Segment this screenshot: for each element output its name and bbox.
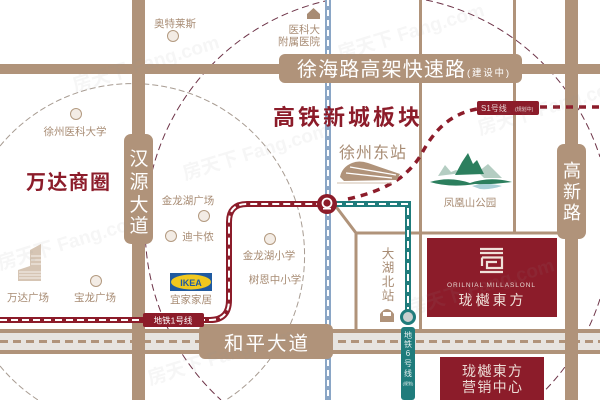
- road: Gaoxin vertical: [565, 0, 578, 400]
- metro line 6: [335, 204, 408, 315]
- icon and label: IKEA: [170, 273, 212, 306]
- POI: outlets: [154, 17, 196, 42]
- watermarks: 房天下 Fang.com: [405, 254, 557, 320]
- road: Hanyuan vertical: [132, 0, 145, 400]
- POI: Jinlonghu primary school: 金龙湖小学: [243, 249, 295, 262]
- label: Dahu North station: 北: [382, 275, 395, 289]
- label: Hanyuan Avenue: 道: [129, 215, 149, 237]
- POI: hospital: 附属医院: [278, 35, 320, 48]
- marker: Dahu North stop: [402, 310, 414, 324]
- label: Xuhai elevated road: [279, 54, 522, 83]
- watermarks: 房天下 Fang.com: [70, 31, 222, 97]
- POI: outlets: 奥特莱斯: [154, 17, 196, 30]
- label: metro line 1: [143, 313, 204, 327]
- panel: project logo: [427, 238, 557, 317]
- label: Xuzhou East station: 徐州东站: [339, 144, 406, 162]
- label: metro line 6: 号: [404, 359, 412, 368]
- icon: subway station: [380, 309, 394, 322]
- project chinese name: 珑樾東方: [458, 292, 524, 308]
- POI: Decathlon: 迪卡侬: [182, 230, 214, 243]
- road: main horizontal road: [0, 64, 600, 74]
- dashed circle: high-speed rail new town: [145, 0, 600, 400]
- label: Dahu North station: 大: [382, 247, 394, 261]
- label: metro line 1: 地铁1号线: [154, 316, 193, 326]
- POI: medical university: [44, 108, 106, 138]
- POI: Powerlong plaza: 宝龙广场: [74, 291, 116, 304]
- label: Xuhai elevated road: 徐海路高架快速路: [297, 58, 465, 81]
- label: metro line 6: 铁: [404, 339, 412, 349]
- heading: Wanda district: 万达商圈: [26, 171, 110, 194]
- minor roads: [334, 0, 560, 330]
- POI: Jinlonghu plaza: 金龙湖广场: [162, 194, 214, 207]
- label: Hanyuan Avenue: 大: [129, 194, 149, 216]
- label: S1 line: [477, 101, 539, 115]
- project english name: ORILNIAL MILLASLONL: [447, 282, 535, 289]
- panel: sales centre: 营销中心: [462, 379, 522, 395]
- POI: Jinlonghu plaza: [162, 194, 214, 222]
- panel: sales centre: [440, 357, 544, 400]
- POI: hospital: 医科大: [288, 23, 320, 36]
- watermarks: 房天下 Fang.com: [145, 324, 297, 390]
- icon: train: [337, 162, 400, 183]
- POI: Jinlonghu primary school: [243, 234, 295, 262]
- label: Dahu North station: 湖: [382, 260, 394, 275]
- label: Xuhai elevated road: (建设中): [467, 67, 509, 79]
- label: metro line 6: 线: [404, 368, 412, 378]
- label: metro line 6: 6: [406, 349, 411, 358]
- label: Dahu North station: [382, 247, 395, 303]
- icon and label: IKEA: 宜家家居: [170, 293, 212, 306]
- POI: Fenghuang Mountain park: 凤凰山公园: [444, 197, 496, 209]
- label: Gaoxin Road: 路: [563, 203, 581, 223]
- icon: railway station marker: [317, 194, 337, 214]
- label: Heping Avenue: [199, 324, 333, 359]
- label: Gaoxin Road: 新: [563, 182, 581, 202]
- label: Dahu North station: 站: [382, 289, 394, 303]
- label: S1 line: (规划中): [515, 106, 534, 113]
- label: Hanyuan Avenue: 汉: [129, 148, 149, 170]
- label: metro line 6: (规划): [403, 380, 414, 386]
- POI: Wanda plaza: 万达广场: [7, 291, 49, 304]
- POI: Shuen school: 树恩中小学: [249, 273, 301, 286]
- POI: Decathlon: [166, 230, 214, 243]
- POI: Powerlong plaza: [74, 276, 116, 304]
- icon and label: IKEA: IKEA: [180, 278, 202, 288]
- panel: sales centre: 珑樾東方: [462, 363, 522, 379]
- label: S1 line: S1号线: [481, 103, 507, 113]
- S1 line dashed: [348, 107, 600, 199]
- watermarks: 房天下 Fang.com: [335, 0, 487, 65]
- label: Hanyuan Avenue: 源: [129, 171, 149, 193]
- dashed circle: Wanda business district: [0, 84, 305, 400]
- road: Heping Avenue band: [0, 329, 600, 354]
- POI: hospital: [278, 8, 320, 48]
- blue high-speed rail line: [325, 0, 331, 400]
- POI: Wanda plaza: [7, 244, 49, 304]
- label: Hanyuan Avenue: [124, 134, 153, 244]
- icon: project logo mark: [480, 249, 503, 272]
- metro line 1: [0, 204, 325, 320]
- label: Gaoxin Road: 高: [563, 161, 581, 181]
- label: Gaoxin Road: [557, 144, 586, 239]
- watermarks: 房天下 Fang.com: [180, 119, 332, 185]
- heading: HSR new town: 高铁新城板块: [273, 105, 420, 130]
- label: metro line 6: [401, 327, 415, 400]
- icon: mountain park: [430, 153, 512, 189]
- label: metro line 6: 地: [404, 330, 412, 340]
- POI: medical university: 徐州医科大学: [44, 125, 106, 138]
- label: Heping Avenue: 和平大道: [224, 333, 308, 355]
